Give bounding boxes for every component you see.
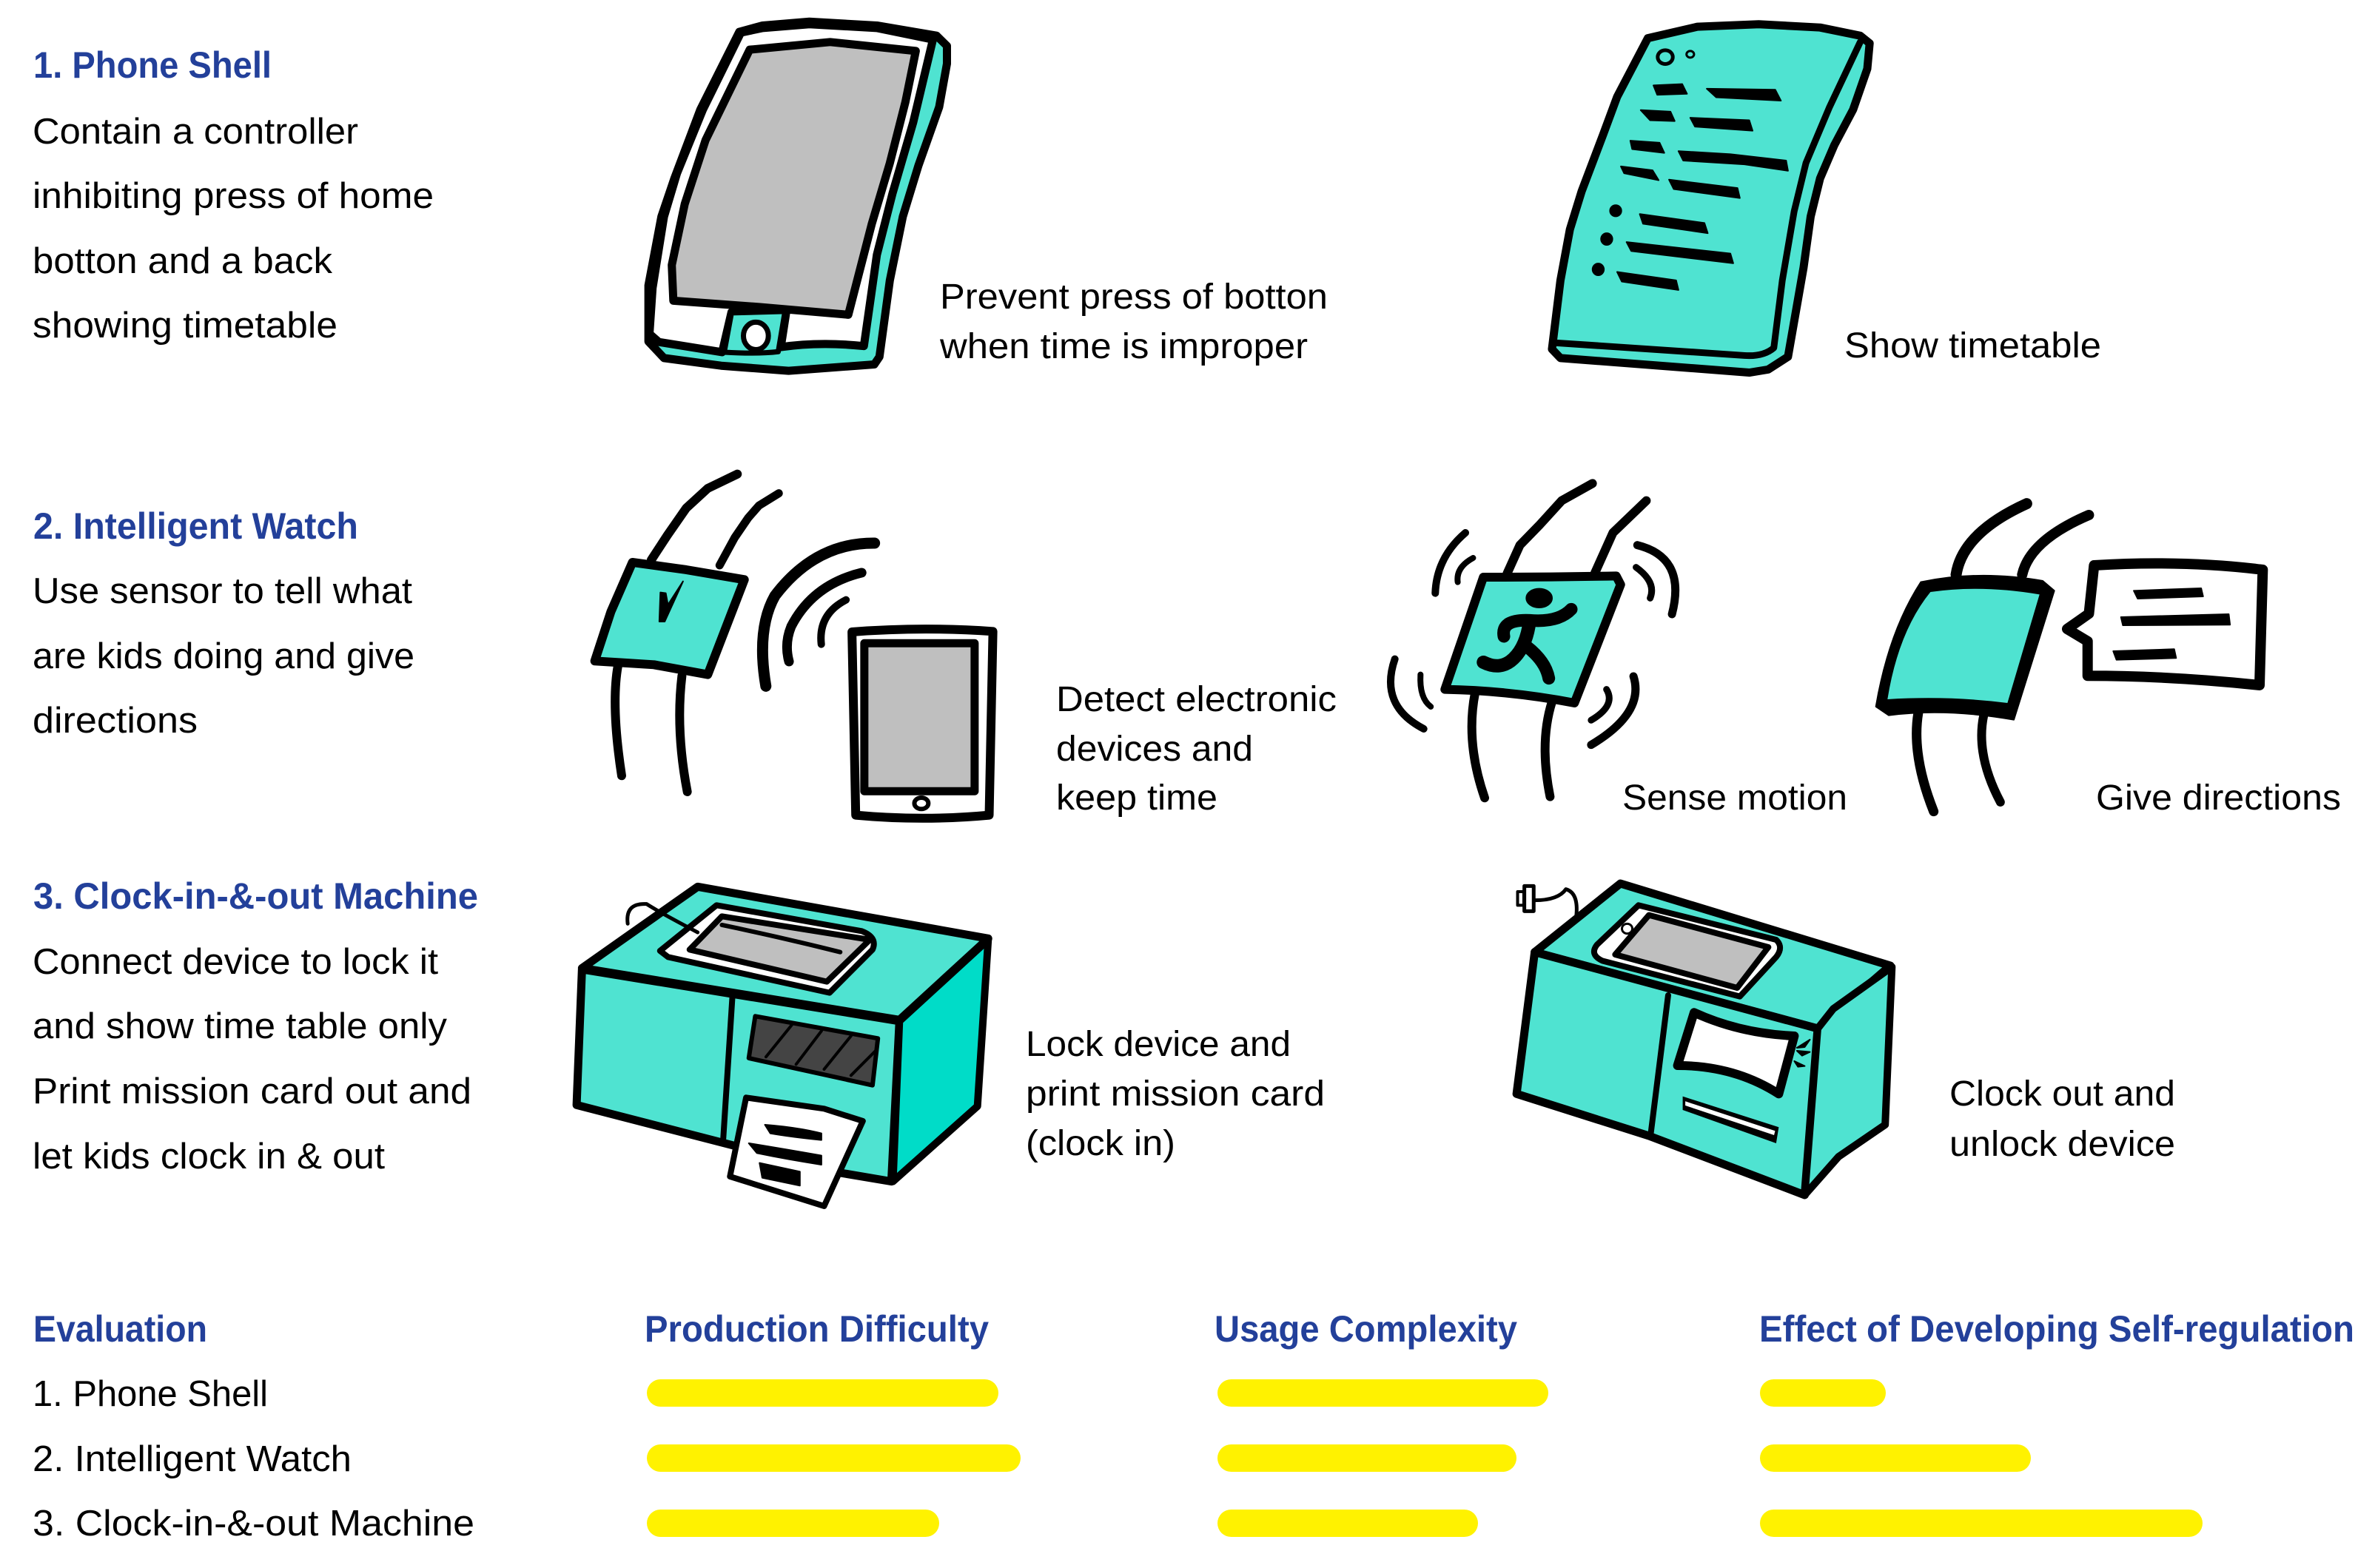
icon: watch detecting a nearby device bbox=[595, 474, 993, 818]
signal waves bbox=[762, 543, 875, 686]
text block: phone shell details bbox=[33, 112, 434, 346]
text block: machine details: and show time table only bbox=[33, 1006, 448, 1046]
text block: machine details: Print mission card out and bbox=[33, 1071, 471, 1111]
row label: clock-in-and-out machine: 3. Clock-in-&-out Machine bbox=[33, 1504, 474, 1544]
plug and cable bbox=[1518, 886, 1576, 916]
timetable rows bbox=[1593, 84, 1788, 290]
heading: 1. Phone Shell: 1. Phone Shell bbox=[33, 44, 272, 86]
caption: clock out: Clock out and bbox=[1949, 1074, 2175, 1114]
icon: clock-in machine printing a mission card bbox=[577, 886, 988, 1206]
caption: lock device: print mission card bbox=[1026, 1074, 1325, 1114]
card slot bbox=[1683, 1097, 1778, 1143]
icon: watch sensing motion bbox=[1391, 483, 1676, 798]
caption: lock device: Lock device and bbox=[1026, 1025, 1291, 1064]
text block: machine details bbox=[33, 942, 471, 1177]
icon: watch giving directions bbox=[1876, 504, 2263, 812]
indicator lights bbox=[1794, 1040, 1810, 1067]
mission card bbox=[730, 1097, 863, 1206]
caption: prevent press of botton: when time is improper bbox=[939, 327, 1308, 366]
panel: evaluation chart bbox=[33, 1308, 2354, 1544]
icon: clock-out machine bbox=[1516, 884, 1892, 1195]
card window bbox=[1678, 1012, 1794, 1094]
caption: prevent press of botton bbox=[939, 277, 1328, 366]
text block: watch details: are kids doing and give bbox=[33, 636, 414, 676]
text block: phone shell details: botton and a back bbox=[33, 241, 333, 281]
column heading: Usage Complexity: Usage Complexity bbox=[1215, 1308, 1517, 1350]
motion lines bbox=[1391, 533, 1676, 745]
panel: phone shell description bbox=[33, 44, 434, 346]
bar chart: usage complexity bbox=[1217, 1379, 1548, 1537]
caption: lock device bbox=[1026, 1025, 1325, 1163]
caption: detect electronic devices bbox=[1056, 680, 1337, 818]
panel: intelligent watch description bbox=[33, 505, 414, 741]
caption: detect electronic devices: devices and bbox=[1056, 730, 1253, 769]
device on top bbox=[1594, 905, 1780, 997]
caption: show timetable: Show timetable bbox=[1844, 326, 2101, 366]
text block: phone shell details: showing timetable bbox=[33, 306, 337, 346]
caption: give directions: Give directions bbox=[2096, 778, 2341, 818]
heading: 2. Intelligent Watch: 2. Intelligent Watch bbox=[33, 505, 358, 547]
caption: sense motion: Sense motion bbox=[1622, 778, 1847, 818]
icon: phone shell front with home button bbox=[648, 21, 947, 371]
row label: intelligent watch: 2. Intelligent Watch bbox=[33, 1439, 352, 1479]
bar chart: effect of developing self-regulation bbox=[1760, 1379, 2203, 1537]
device on top bbox=[628, 904, 874, 993]
speech bubble with directions bbox=[2067, 563, 2263, 685]
text block: watch details: directions bbox=[33, 701, 198, 741]
caption: clock out bbox=[1949, 1074, 2175, 1164]
text block: phone shell details: inhibiting press of home bbox=[33, 176, 434, 216]
vent bbox=[749, 1016, 878, 1086]
text block: phone shell details: Contain a controller bbox=[33, 112, 358, 152]
running figure bbox=[1483, 589, 1571, 679]
heading: Evaluation: Evaluation bbox=[33, 1308, 207, 1350]
caption: prevent press of botton: Prevent press of botton bbox=[940, 277, 1328, 317]
caption: lock device: (clock in) bbox=[1026, 1124, 1175, 1163]
row label: phone shell: 1. Phone Shell bbox=[33, 1374, 268, 1414]
tablet device bbox=[852, 629, 993, 818]
panel: clock-in-and-out machine description bbox=[33, 875, 478, 1177]
column heading: Effect of Developing Self-regulation: Effect of Developing Self-regulation bbox=[1759, 1308, 2354, 1350]
heading: 3. Clock-in-&-out Machine: 3. Clock-in-&-out Machine bbox=[33, 875, 478, 917]
caption: detect electronic devices: keep time bbox=[1056, 778, 1217, 818]
column heading: Production Difficulty: Production Difficulty bbox=[645, 1308, 989, 1350]
caption: clock out: unlock device bbox=[1949, 1125, 2175, 1164]
caption: detect electronic devices: Detect electronic bbox=[1056, 680, 1337, 719]
bar chart: production difficulty bbox=[647, 1379, 1021, 1537]
text block: watch details: Use sensor to tell what bbox=[33, 571, 412, 611]
text block: machine details: let kids clock in & out bbox=[33, 1137, 385, 1177]
text block: machine details: Connect device to lock it bbox=[33, 942, 438, 982]
icon: phone shell back showing timetable bbox=[1552, 24, 1870, 373]
text block: watch details bbox=[33, 571, 414, 741]
